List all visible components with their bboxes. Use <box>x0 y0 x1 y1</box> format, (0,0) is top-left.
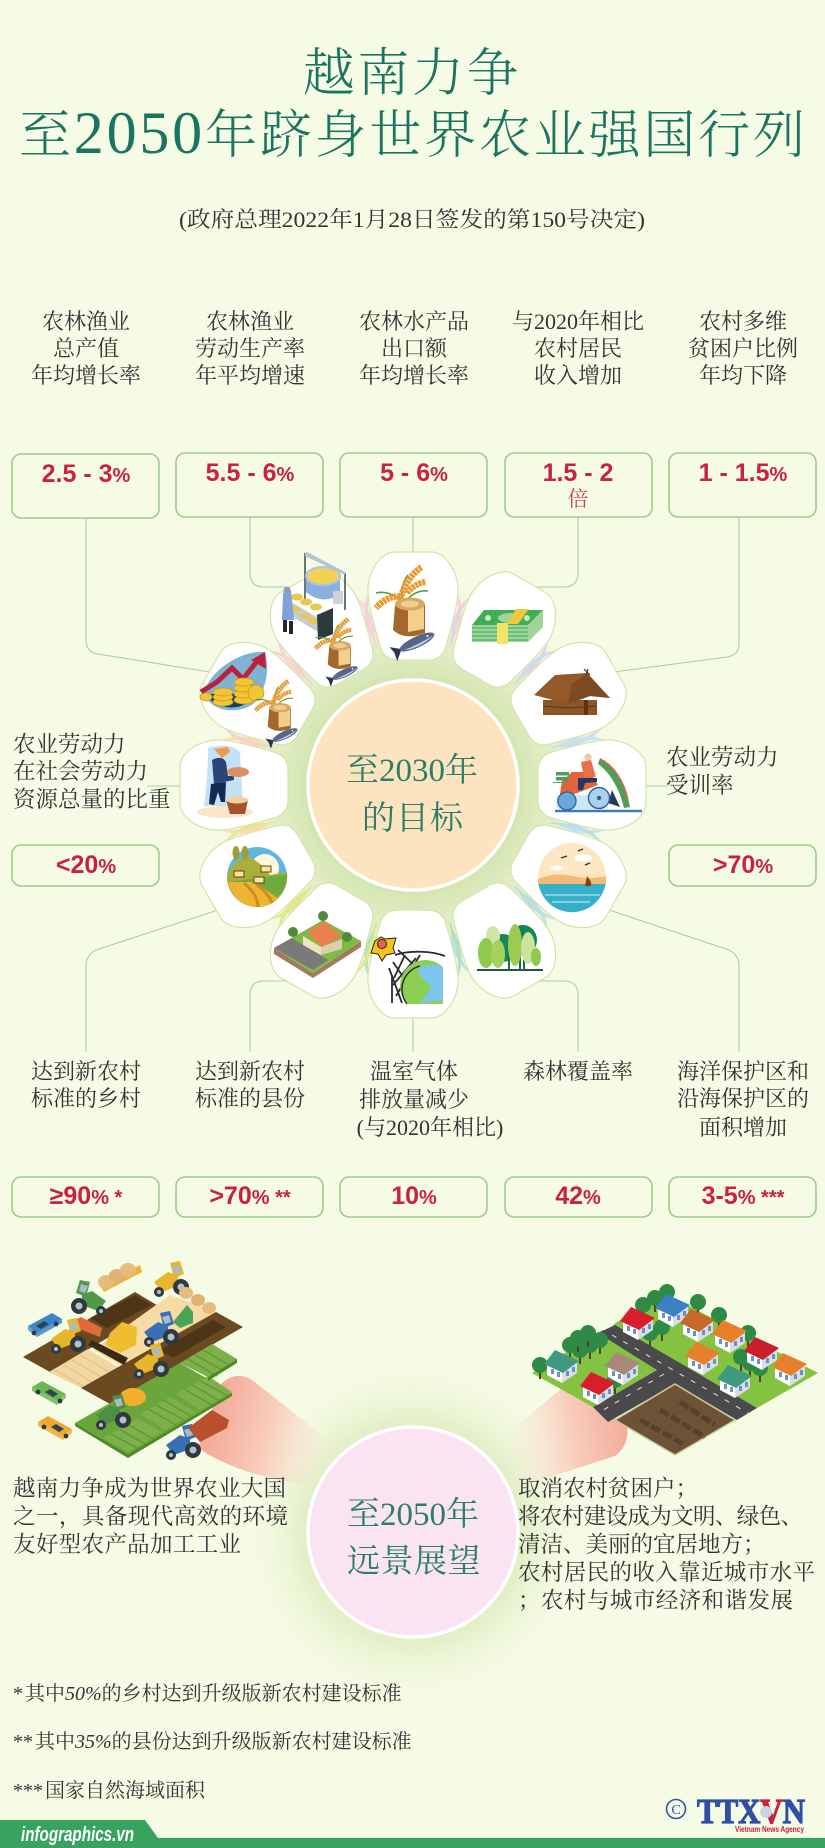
text: vision right: 清洁、美丽的宜居地方； <box>518 1532 766 1557</box>
header: column labels: 出口额 <box>381 336 448 361</box>
text: vision right: ；农村与城市经济和谐发展 <box>518 1588 793 1613</box>
text: vision left: 友好型农产品加工工业 <box>13 1532 241 1557</box>
footnotes: *其中50%的乡村达到升级版新农村建设标准 <box>13 1682 402 1705</box>
beam right <box>500 1388 628 1486</box>
bottom labels: 森林覆盖率 <box>523 1059 633 1084</box>
header: column labels: 劳动生产率 <box>195 336 305 361</box>
value boxes: bottom row: >70% ** <box>209 1182 291 1210</box>
value boxes: bottom row <box>12 1177 816 1217</box>
side value boxes: <20% <box>56 851 116 879</box>
value boxes: top row: 2.5 - 3% <box>42 460 131 488</box>
logo: TTXVN: TTXVN <box>697 1792 805 1831</box>
footnotes: **其中35%的县份达到升级版新农村建设标准 <box>13 1730 412 1753</box>
icon: seascape circle <box>538 843 606 912</box>
header: column labels: 农林渔业 <box>206 309 294 334</box>
bottom labels: 排放量减少 <box>359 1087 469 1112</box>
center circle 2050: 远景展望 <box>347 1543 481 1580</box>
side label: right: 农业劳动力 <box>666 745 779 770</box>
text: vision left: 越南力争成为世界农业大国 <box>13 1476 286 1501</box>
petals ring <box>180 552 646 1018</box>
header: column labels: 贫困户比例 <box>688 336 798 361</box>
logo: TTXVN: Vietnam News Agency <box>735 1824 804 1834</box>
bottom labels: 面积增加 <box>699 1115 787 1140</box>
side label: left: 资源总量的比重 <box>13 787 171 812</box>
header: column labels: 年均增长率 <box>31 363 141 388</box>
side label: right: 受训率 <box>666 773 734 798</box>
header: column labels: 农村居民 <box>534 336 622 361</box>
illustration: farm <box>23 1261 243 1460</box>
center glow 2030 <box>198 570 628 1000</box>
center glow 2050 <box>243 1362 583 1702</box>
header: column labels: 年平均增速 <box>195 363 305 388</box>
header: column labels: 与2020年相比 <box>512 309 644 334</box>
side label: left: 农业劳动力 <box>13 732 126 757</box>
bottom labels: 达到新农村 <box>31 1059 141 1084</box>
value boxes: top row: 5.5 - 6% <box>206 459 295 487</box>
icon: trees <box>477 924 543 971</box>
header: column labels: 总产值 <box>53 336 119 361</box>
bottom labels: (与2020年相比) <box>357 1115 503 1140</box>
header: column labels: 农林渔业 <box>42 309 130 334</box>
header: column labels <box>31 309 798 388</box>
icon: village circle <box>227 846 287 907</box>
beam left <box>198 1376 335 1484</box>
header: column labels: 收入增加 <box>534 363 622 388</box>
header: column labels: 年均下降 <box>699 363 787 388</box>
side label: left: 在社会劳动力 <box>13 759 148 784</box>
value boxes: bottom row: 10% <box>391 1182 437 1210</box>
text: vision left <box>13 1476 288 1557</box>
footer bar: infographics.vn <box>21 1824 134 1846</box>
text: vision right: 将农村建设成为文明、绿色、 <box>518 1504 803 1529</box>
bottom labels: 温室气体 <box>370 1059 458 1084</box>
bottom labels: 标准的乡村 <box>31 1086 141 1111</box>
center circle 2030: 的目标 <box>362 800 464 837</box>
bottom labels: 达到新农村 <box>195 1059 305 1084</box>
title: 至2050年跻身世界农业强国行列 <box>19 100 805 166</box>
header: column labels: 农村多维 <box>699 309 787 334</box>
illustration: village <box>532 1284 818 1455</box>
value boxes: bottom row: 3-5% *** <box>702 1182 785 1210</box>
bottom labels: 海洋保护区和 <box>677 1059 809 1084</box>
value boxes: top row: 1 - 1.5% <box>699 459 788 487</box>
side label: left <box>13 732 171 812</box>
text: vision right <box>518 1476 815 1613</box>
title: 越南力争 <box>303 46 521 103</box>
icon: farmer winnowing <box>197 746 253 818</box>
center circle 2030 <box>308 680 518 890</box>
icon: food processing <box>282 552 360 687</box>
bottom labels: 标准的县份 <box>195 1086 305 1111</box>
header: column labels: 农林水产品 <box>359 309 469 334</box>
value boxes: bottom row: ≥90% * <box>50 1182 123 1210</box>
connector lines <box>86 517 739 1052</box>
side value boxes <box>12 845 816 886</box>
tractors and vehicles <box>28 1261 229 1460</box>
value boxes: top row: 5 - 6% <box>380 459 448 487</box>
center circle 2050: 至2050年 <box>347 1496 479 1533</box>
footer bar <box>0 1820 825 1848</box>
value boxes: top row: 1.5 - 2 <box>543 459 613 487</box>
value boxes: top row: 倍 <box>568 487 588 511</box>
bottom labels: 沿海保护区的 <box>677 1086 809 1111</box>
logo: TTXVN: C <box>671 1803 681 1818</box>
icon: rising chart with coins <box>200 652 300 749</box>
icon: cash stack <box>472 609 543 644</box>
value boxes: bottom row: 42% <box>555 1182 601 1210</box>
side label: right <box>666 745 779 798</box>
icon: farmer on cart <box>553 754 642 811</box>
subtitle: (政府总理2022年1月28日签发的第150号决定) <box>179 207 645 232</box>
value boxes: top row <box>12 453 816 518</box>
center circle 2050 <box>308 1427 518 1637</box>
icon: thatched hut <box>534 669 610 715</box>
footnotes: ***国家自然海域面积 <box>13 1779 206 1802</box>
icon: isometric house <box>274 911 361 978</box>
icon: rice, stump and fish <box>376 567 438 662</box>
center circle 2030: 至2030年 <box>346 752 478 789</box>
bottom labels <box>31 1059 809 1140</box>
text: vision right: 取消农村贫困户； <box>518 1476 698 1501</box>
icon: sun and globe <box>371 937 445 1004</box>
title <box>19 46 805 166</box>
text: vision right: 农村居民的收入靠近城市水平 <box>518 1560 815 1585</box>
text: vision left: 之一，具备现代高效的环境 <box>13 1504 288 1530</box>
header: column labels: 年均增长率 <box>359 363 469 388</box>
side value boxes: >70% <box>713 851 773 879</box>
footnotes <box>13 1682 412 1802</box>
